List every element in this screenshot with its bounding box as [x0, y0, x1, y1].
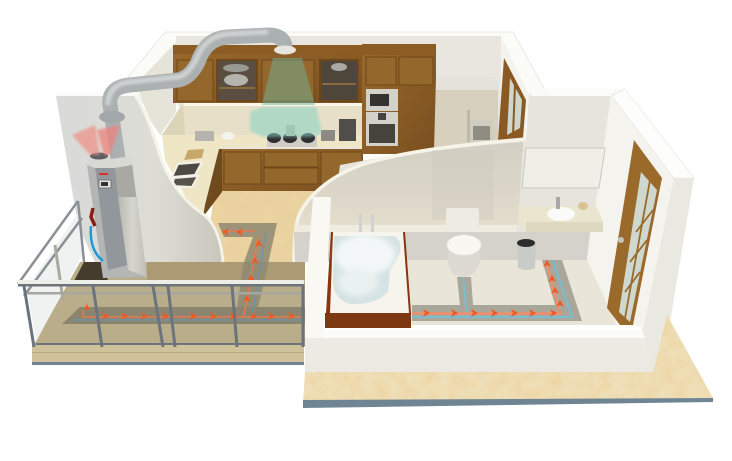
panel: backsplash and countertop	[162, 103, 363, 217]
heating pipes: balcony and kitchen floor	[62, 223, 305, 324]
marble base	[303, 315, 713, 408]
balcony front railing	[18, 280, 304, 347]
cabinet door left	[177, 60, 213, 101]
fridge	[434, 77, 498, 150]
panel: upper kitchen cabinets	[173, 45, 363, 103]
panel: balcony floor	[32, 262, 305, 365]
oven	[366, 112, 398, 146]
flow arrows: bathroom	[423, 260, 564, 317]
panel: partition wall behind heater	[56, 92, 223, 280]
panel: heat pump water heater	[87, 152, 147, 286]
control panel	[99, 173, 111, 188]
panel: bathroom floor	[294, 232, 617, 325]
curved glass partition	[294, 139, 526, 262]
toilet	[446, 208, 481, 277]
wall mirror	[522, 148, 605, 188]
hot water pipe	[91, 208, 95, 226]
bathroom door	[607, 140, 662, 325]
heating pipes: bathroom floor	[412, 260, 582, 321]
cold water pipe	[91, 226, 103, 261]
air duct	[99, 32, 296, 158]
panel: bathroom back wall	[330, 89, 625, 240]
steam	[335, 235, 395, 296]
flow arrows: balcony	[83, 228, 295, 320]
cabinet door centre	[262, 60, 314, 101]
taps	[359, 214, 374, 232]
panel: bathroom right wall	[587, 89, 694, 372]
panel: bathroom front wall	[305, 197, 653, 372]
hood air beams	[250, 58, 322, 137]
waste bin	[517, 239, 536, 270]
microwave	[366, 89, 398, 111]
dark floor recess beside heater	[74, 262, 108, 281]
panel: lower kitchen cabinets	[203, 149, 363, 217]
panel: bathtub	[325, 214, 411, 328]
kitchen door	[498, 58, 526, 140]
appliances: sinks	[172, 149, 204, 187]
appliances: hob, coffee machine and toaster	[195, 119, 356, 147]
panel: kitchen floor	[210, 188, 345, 262]
vanity counter with basin	[519, 197, 603, 232]
ceiling diffuser	[274, 46, 296, 54]
balcony left glass railing	[18, 201, 84, 342]
glass cabinet with dishes	[217, 60, 257, 101]
air vent exhaust: red warm air	[72, 125, 120, 155]
panel: tall cabinet	[362, 44, 436, 154]
glass cabinet right	[320, 60, 358, 101]
panel: kitchen room shell	[128, 32, 545, 200]
